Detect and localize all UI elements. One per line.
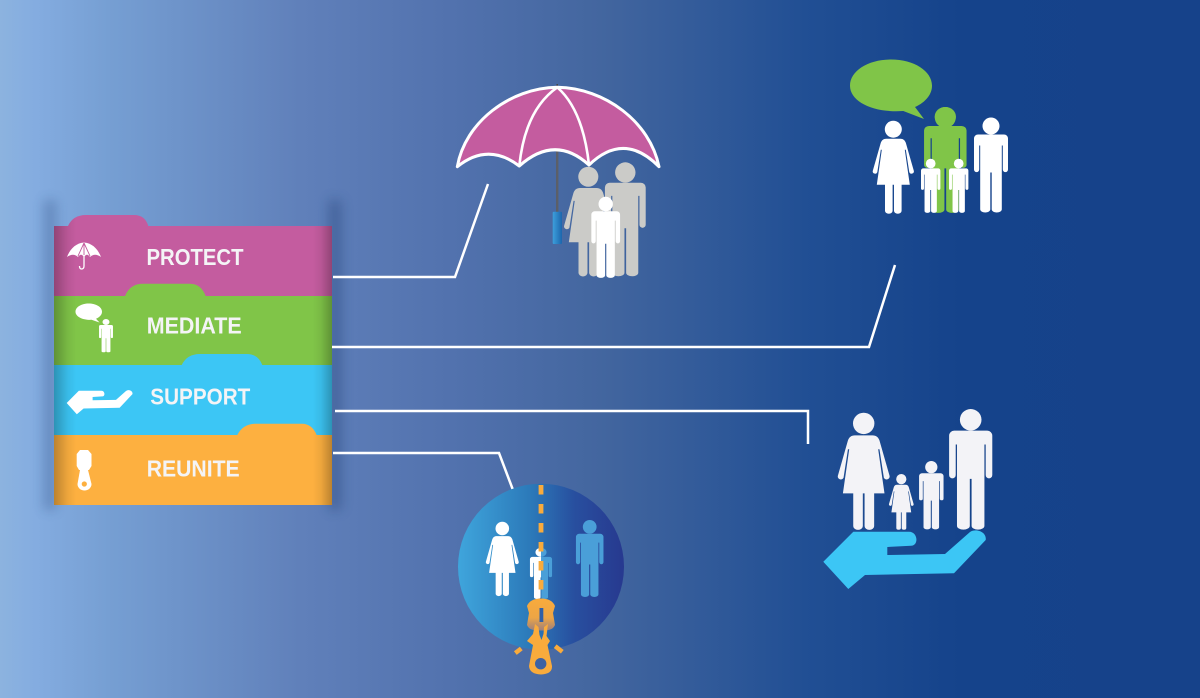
- hand: [823, 530, 986, 589]
- speech bubble: [850, 60, 932, 119]
- zipper pull: [527, 624, 552, 674]
- girl: [889, 474, 914, 530]
- connector: support: [335, 411, 808, 444]
- icon: small umbrella: [67, 242, 101, 269]
- zipper slider: [527, 598, 555, 630]
- zipper dashes: [539, 485, 543, 590]
- tab: reunite: [54, 424, 332, 505]
- umbrella tip: [556, 84, 558, 88]
- pull hole: [535, 658, 546, 669]
- connector: mediate: [332, 265, 895, 347]
- illustration: umbrella over family: [457, 84, 659, 278]
- icon: small hand: [67, 390, 133, 414]
- child left half: [530, 548, 541, 599]
- man: [949, 409, 992, 530]
- man: [974, 118, 1008, 212]
- man: [576, 520, 603, 597]
- woman: [838, 413, 890, 530]
- mediator: [924, 107, 967, 213]
- icon: small speech bubble and person: [76, 304, 113, 352]
- umbrella shaft: [556, 148, 558, 213]
- spark left: [514, 647, 523, 655]
- umbrella canopy: [457, 87, 659, 167]
- icon: small zipper: [77, 450, 92, 490]
- slider slot: [540, 608, 543, 622]
- child right half: [541, 548, 552, 599]
- child right: [949, 159, 968, 213]
- tab: support: [54, 354, 332, 436]
- boy: [919, 461, 944, 529]
- panel: tab stack: [44, 200, 341, 510]
- illustration: reunification zipper: [458, 484, 624, 674]
- tab edge shading: [54, 215, 332, 505]
- woman: [564, 167, 613, 276]
- tab: protect: [54, 215, 332, 297]
- woman: [873, 121, 914, 214]
- woman: [486, 522, 519, 596]
- label: PROTECT: PROTECT: [146, 244, 244, 270]
- illustration: family on supporting hand: [823, 409, 992, 589]
- child: [591, 197, 620, 278]
- label: MEDIATE: MEDIATE: [147, 312, 242, 338]
- connector: protect: [333, 184, 488, 277]
- circle: [458, 484, 624, 650]
- man: [605, 162, 646, 276]
- illustration: mediation family: [850, 60, 1008, 214]
- spark right: [554, 644, 564, 654]
- connector: reunite: [333, 453, 513, 490]
- label: REUNITE: REUNITE: [147, 456, 240, 482]
- umbrella ribs: [519, 87, 589, 166]
- tab: mediate: [54, 284, 332, 366]
- label: SUPPORT: SUPPORT: [150, 384, 250, 410]
- umbrella handle: [553, 212, 562, 244]
- child left: [921, 159, 940, 213]
